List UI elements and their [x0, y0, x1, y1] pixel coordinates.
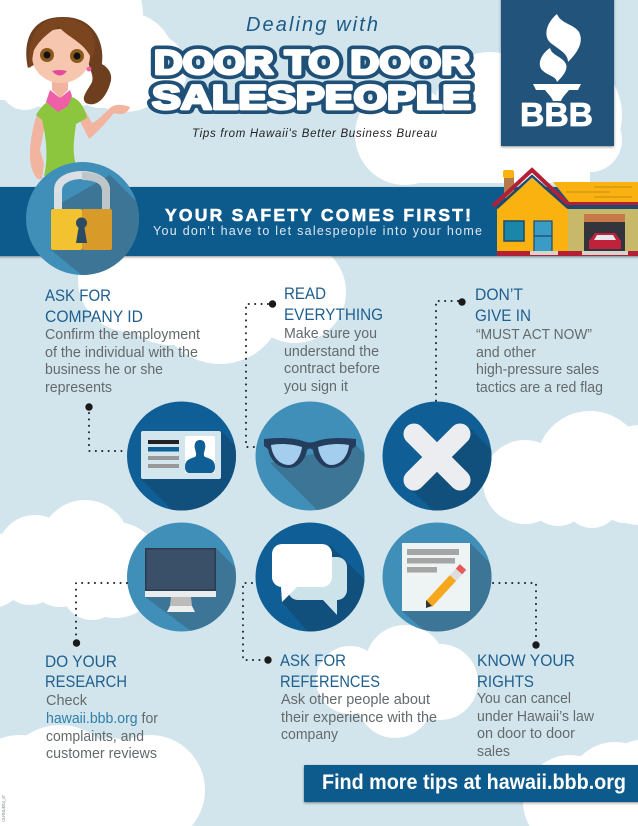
icon: BBB torch	[533, 14, 581, 101]
tip: don't give in: “MUST ACT NOW”	[476, 327, 592, 343]
icon: padlock	[26, 162, 139, 275]
title: Door to Door Salespeople	[152, 44, 471, 117]
tip: know your rights	[477, 652, 595, 760]
banner subheading: You don't have to let salespeople into your home	[153, 224, 482, 238]
icon circle: ID card	[127, 402, 236, 510]
tip: ask for company ID	[45, 287, 200, 396]
connector: do your research	[73, 583, 127, 647]
pink collar	[46, 90, 72, 112]
print code: OLRN14014_v7	[1, 795, 6, 822]
foundation	[497, 251, 638, 256]
subtitle: Tips from Hawaii's Better Business Bureau	[192, 128, 438, 140]
tip: ask for company ID: Confirm the employment	[45, 327, 200, 343]
tip: don't give in: high-pressure sales	[476, 362, 599, 378]
tip: know your rights: sales	[477, 744, 510, 760]
title: Door to Door Salespeople: SALESPEOPLE	[152, 79, 471, 117]
tip: ask for references	[280, 652, 437, 743]
door	[534, 221, 552, 252]
tip: don't give in: DON’T	[475, 286, 523, 304]
title: Door to Door Salespeople: DOOR TO DOOR	[154, 44, 470, 82]
legs and arms	[30, 105, 130, 179]
banner: your safety comes first	[0, 187, 638, 256]
tip: know your rights: KNOW YOUR	[477, 652, 575, 670]
call to action text: Find more tips at hawaii.bbb.org	[322, 771, 626, 794]
tip: ask for references: Ask other people about	[281, 692, 430, 708]
mouth	[52, 70, 67, 76]
BBB wordmark: BBB	[520, 96, 593, 133]
call to action button	[304, 765, 638, 802]
tip: do your research	[45, 653, 158, 762]
ponytail	[84, 62, 111, 104]
tip: do your research: RESEARCH	[45, 673, 127, 691]
tip: do your research: Check	[46, 693, 88, 709]
hair fringe	[29, 18, 95, 68]
earring	[86, 66, 92, 72]
tip: read everything: you sign it	[284, 379, 348, 395]
car	[589, 233, 621, 249]
icon circle: glasses	[256, 402, 364, 510]
tip: don't give in: GIVE IN	[475, 307, 531, 325]
tip: know your rights: under Hawaii’s law	[477, 709, 595, 725]
tip: know your rights: You can cancel	[477, 691, 571, 707]
hair back	[26, 17, 102, 68]
connector: don't give in	[436, 298, 466, 402]
tip: read everything: EVERYTHING	[284, 306, 383, 324]
heading: Dealing with: Dealing with	[246, 14, 378, 36]
icon circle: computer monitor	[127, 522, 236, 632]
tip: read everything: contract before	[284, 361, 380, 377]
title: Door to Door Salespeople: SALESPEOPLE	[152, 79, 471, 117]
tip: know your rights: RIGHTS	[477, 673, 534, 691]
tip: do your research: hawaii.bbb.org for	[46, 711, 158, 727]
tip: ask for company ID: COMPANY ID	[45, 308, 143, 326]
title: Door to Door Salespeople: DOOR TO DOOR	[154, 44, 470, 82]
banner heading: YOUR SAFETY COMES FIRST!	[165, 205, 471, 225]
tip: know your rights: on door to door	[477, 726, 575, 742]
neck	[52, 74, 68, 98]
character: saleswoman	[26, 17, 130, 179]
tip: do your research: complaints, and	[46, 729, 144, 745]
chimney	[504, 176, 514, 198]
window	[504, 221, 524, 241]
tip: do your research: customer reviews	[46, 746, 157, 762]
icon circle: document and pencil	[382, 522, 492, 632]
tip: ask for references: their experience with the	[281, 710, 437, 726]
tip: read everything: READ	[284, 285, 326, 303]
tip: ask for company ID: business he or she	[45, 362, 163, 378]
garage wall	[568, 209, 638, 252]
tip: ask for references: REFERENCES	[280, 673, 380, 691]
tip: ask for company ID: of the individual with the	[45, 345, 198, 361]
tip: ask for company ID: ASK FOR	[45, 287, 111, 305]
connector: ask for references	[243, 583, 272, 664]
tip: don't give in: and other	[476, 345, 536, 361]
tip: ask for references: company	[281, 727, 339, 743]
tip: read everything	[284, 285, 383, 395]
connector: know your rights	[493, 583, 540, 649]
tip: ask for company ID: represents	[45, 380, 112, 396]
icon circle: speech bubbles	[256, 522, 364, 632]
connector: read everything	[246, 300, 276, 447]
green dress	[36, 97, 87, 176]
tip: ask for references: ASK FOR	[280, 652, 346, 670]
tip: don't give in: tactics are a red flag	[476, 380, 603, 396]
icon circle: X mark	[382, 402, 492, 510]
main gable	[497, 178, 568, 252]
tip: read everything: Make sure you	[284, 326, 377, 342]
garage door	[584, 214, 625, 251]
icon: house	[493, 170, 638, 256]
tip: read everything: understand the	[284, 344, 379, 360]
eyes	[40, 48, 54, 62]
garage roof	[553, 182, 638, 203]
tip: don't give in	[475, 286, 603, 396]
tip: do your research: DO YOUR	[45, 653, 117, 671]
BBB logo panel	[501, 0, 614, 146]
connector: company ID	[85, 403, 124, 451]
face	[32, 29, 90, 83]
